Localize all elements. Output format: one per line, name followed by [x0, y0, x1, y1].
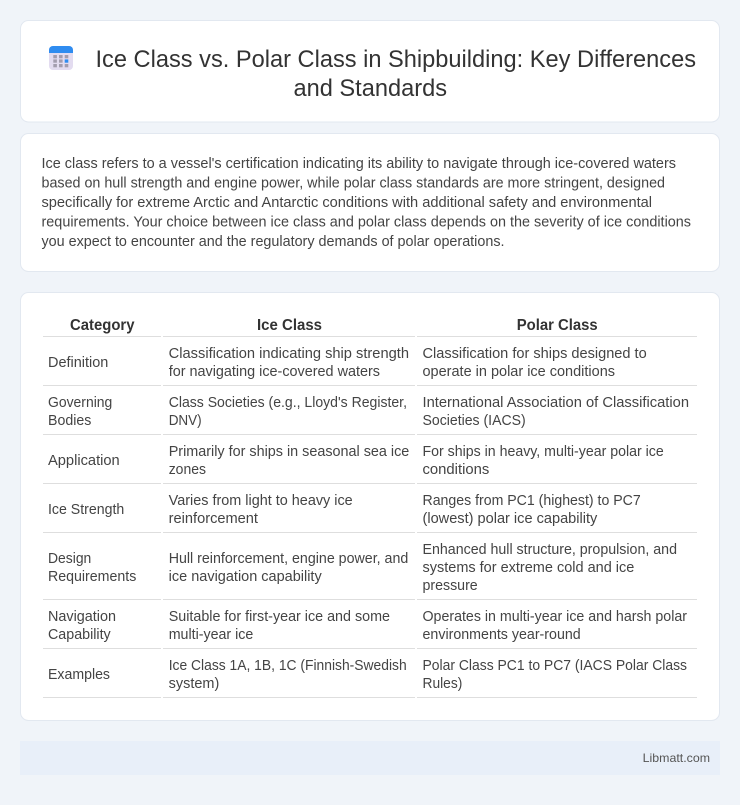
- row: Navigation Capability: Suitable for first-year ice and some: [169, 609, 390, 625]
- row: Governing Bodies: Societies (IACS): [422, 413, 526, 429]
- row: Definition: Classification indicating ship strength: [169, 346, 409, 362]
- row: Governing Bodies: International Association of Classification: [422, 395, 689, 411]
- row: Examples: Polar Class PC1 to PC7 (IACS Polar Class: [422, 658, 687, 674]
- table header: [43, 317, 697, 337]
- row: Application: Primarily for ships in seasonal sea ice: [169, 444, 409, 460]
- row: Ice Strength: Varies from light to heavy ice: [169, 493, 353, 509]
- text block: summary paragraph: [42, 156, 691, 250]
- row: Design Requirements: Requirements: [48, 569, 136, 585]
- title: and Standards: [294, 75, 447, 102]
- row: Navigation Capability: Navigation: [48, 609, 116, 625]
- text block: summary paragraph: specifically for extreme Arctic and Antarctic conditions with additional safety and environmental: [42, 195, 652, 211]
- row: Ice Strength: Ice Strength: [48, 502, 124, 518]
- row: Design Requirements: Design: [48, 551, 91, 567]
- row: Navigation Capability: environments year-round: [422, 627, 581, 643]
- panel: summary: [20, 134, 720, 272]
- footer: Libmatt.com: [643, 751, 710, 765]
- text block: summary paragraph: requirements. Your choice between ice class and polar class depends on the severity of ice conditions: [42, 214, 691, 230]
- row: Governing Bodies: Class Societies (e.g., Lloyd's Register,: [169, 395, 407, 411]
- text block: summary paragraph: you expect to encounter and the regulatory demands of polar operations.: [42, 234, 504, 250]
- row: Definition: Classification for ships designed to: [422, 346, 647, 362]
- row: Examples: [43, 658, 697, 698]
- footer: [20, 741, 720, 775]
- row: Examples: Rules): [422, 676, 462, 692]
- row: Governing Bodies: [43, 395, 697, 435]
- row: Examples: Examples: [48, 667, 110, 683]
- row: Design Requirements: Hull reinforcement, engine power, and: [169, 551, 408, 567]
- panel: comparison table: [20, 292, 720, 720]
- row: Design Requirements: pressure: [422, 578, 478, 594]
- row: Navigation Capability: multi-year ice: [169, 627, 253, 643]
- row: Design Requirements: ice navigation capability: [169, 569, 323, 585]
- row: Application: Application: [48, 453, 120, 469]
- row: Application: conditions: [422, 462, 489, 478]
- title: [96, 46, 696, 102]
- row: Examples: Ice Class 1A, 1B, 1C (Finnish-Swedish: [169, 658, 407, 674]
- row: Governing Bodies: Governing: [48, 395, 112, 411]
- row: Application: For ships in heavy, multi-year polar ice: [422, 444, 664, 460]
- row: Governing Bodies: Bodies: [48, 413, 91, 429]
- row: Ice Strength: (lowest) polar ice capability: [422, 511, 598, 527]
- table header: Polar Class: [517, 317, 598, 334]
- row: Navigation Capability: Operates in multi-year ice and harsh polar: [422, 609, 687, 625]
- text block: summary paragraph: Ice class refers to a vessel's certification indicating its ability to navigate through ice-covered waters: [42, 156, 676, 172]
- row: Definition: for navigating ice-covered waters: [169, 364, 380, 380]
- row: Examples: system): [169, 676, 219, 692]
- row: Definition: [43, 346, 697, 386]
- row: Ice Strength: reinforcement: [169, 511, 258, 527]
- row: Ice Strength: [43, 493, 697, 533]
- row: Design Requirements: Enhanced hull structure, propulsion, and: [422, 542, 677, 558]
- row: Governing Bodies: DNV): [169, 413, 202, 429]
- title: Ice Class vs. Polar Class in Shipbuilding: Key Differences: [96, 46, 696, 73]
- icon: calendar: [49, 46, 73, 70]
- row: Ice Strength: Ranges from PC1 (highest) to PC7: [422, 493, 641, 509]
- row: Application: [43, 444, 697, 484]
- row: Navigation Capability: Capability: [48, 627, 111, 643]
- row: Definition: operate in polar ice conditions: [422, 364, 615, 380]
- row: Application: zones: [169, 462, 206, 478]
- panel: title card: [20, 20, 720, 122]
- row: Design Requirements: systems for extreme cold and ice: [422, 560, 634, 576]
- table header: Ice Class: [257, 317, 322, 334]
- table header: Category: [70, 317, 135, 334]
- text block: summary paragraph: based on hull strength and engine power, while polar class standards are more stringent, designed: [42, 176, 665, 192]
- row: Design Requirements: [43, 542, 697, 600]
- row: Definition: Definition: [48, 355, 108, 371]
- row: Navigation Capability: [43, 609, 697, 649]
